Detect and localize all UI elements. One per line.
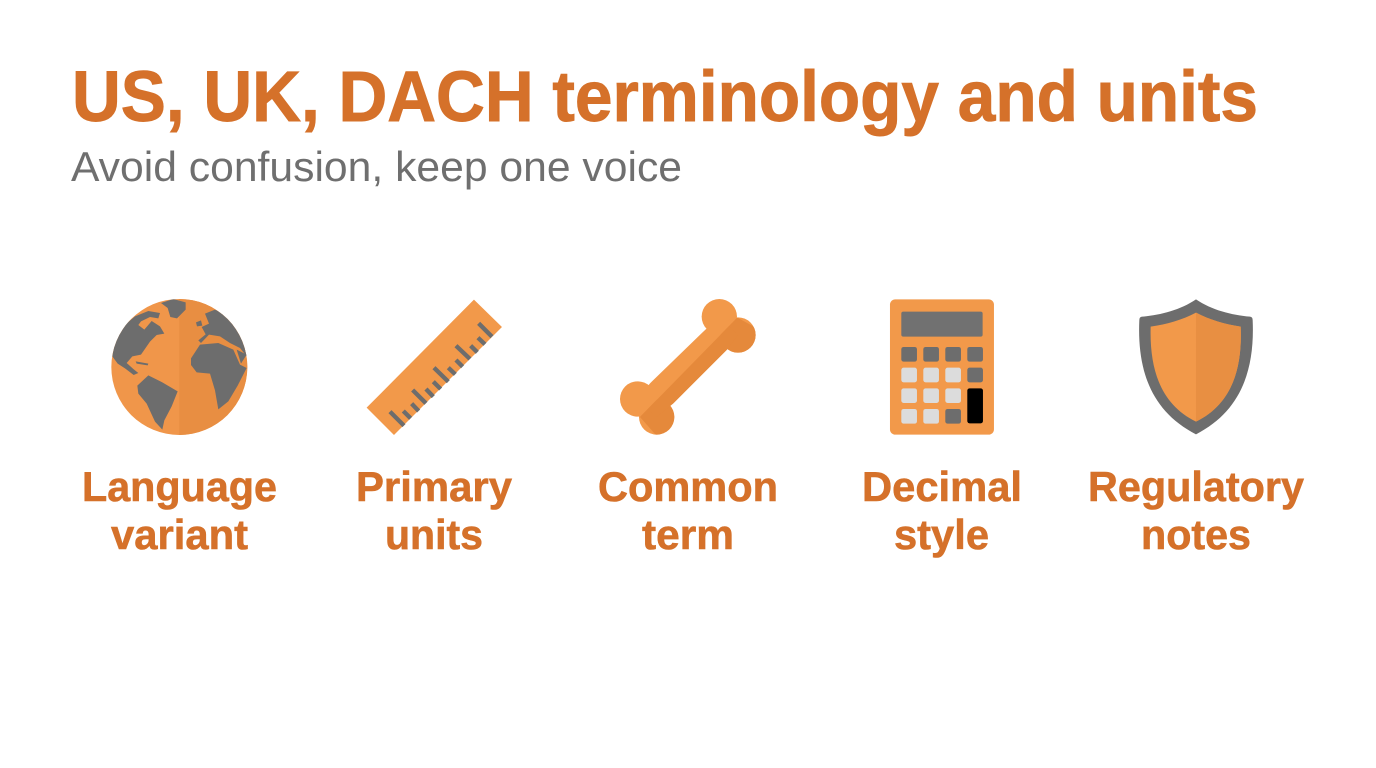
title: US, UK, DACH terminology and units bbox=[72, 58, 1258, 137]
label: decimal style bbox=[862, 463, 1022, 558]
label: decimal style: style bbox=[894, 511, 989, 558]
label: common term: Common bbox=[598, 463, 778, 510]
label: language variant: variant bbox=[111, 511, 248, 558]
label: common term bbox=[598, 463, 778, 558]
label: primary units: units bbox=[385, 511, 483, 558]
label: language variant: Language bbox=[82, 463, 277, 510]
label: regulatory notes: Regulatory bbox=[1088, 463, 1305, 510]
icon: shield bbox=[1139, 299, 1253, 434]
label: primary units bbox=[356, 463, 513, 558]
label: language variant bbox=[82, 463, 277, 558]
icon: bone bbox=[620, 299, 756, 435]
label: common term: term bbox=[642, 511, 734, 558]
label: decimal style: Decimal bbox=[862, 463, 1022, 510]
label: regulatory notes: notes bbox=[1141, 511, 1251, 558]
label: regulatory notes bbox=[1088, 463, 1305, 558]
icon: calculator bbox=[890, 299, 994, 435]
icon: ruler bbox=[367, 300, 502, 435]
icon: globe bbox=[111, 298, 250, 435]
subtitle: Avoid confusion, keep one voice bbox=[71, 143, 682, 190]
label: primary units: Primary bbox=[356, 463, 513, 510]
